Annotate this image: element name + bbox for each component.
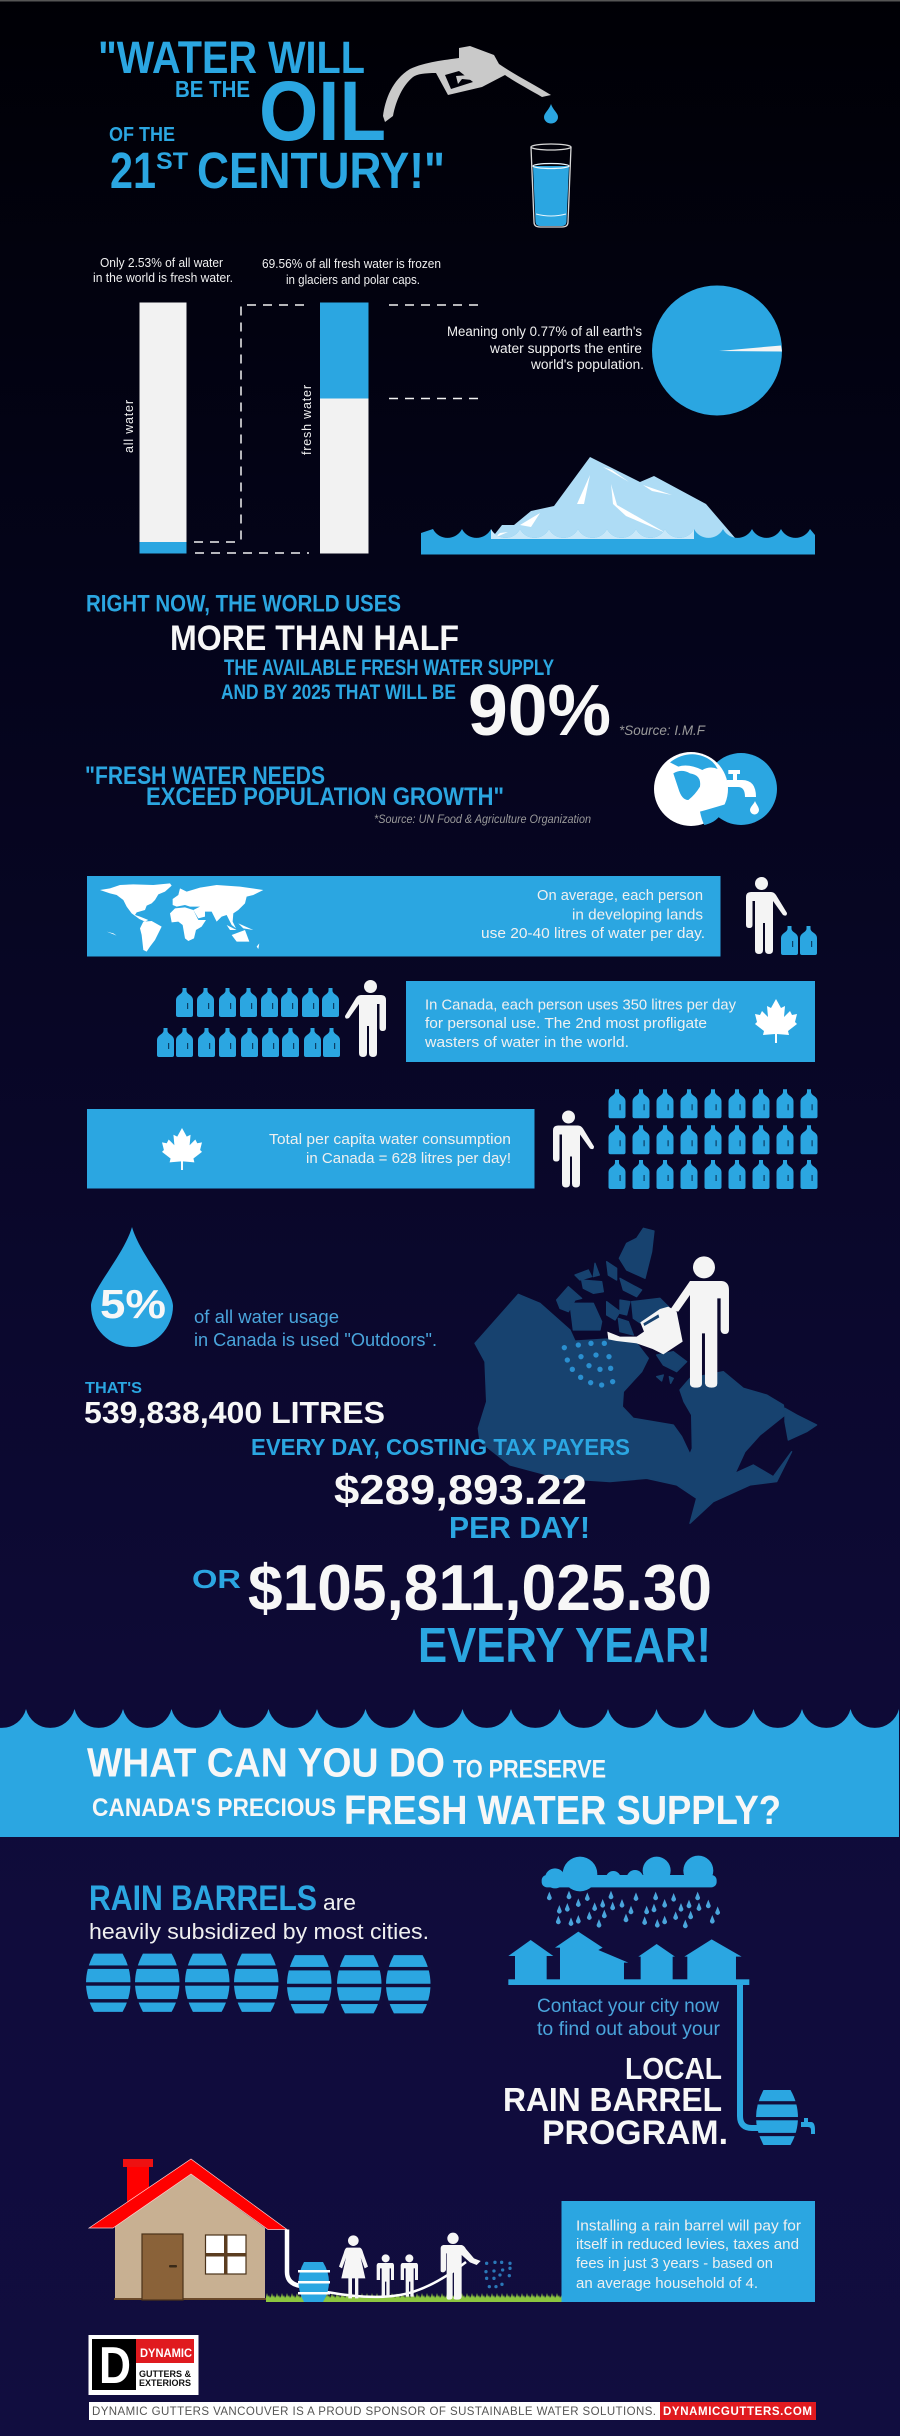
bar chart: fresh water: [300, 302, 368, 554]
text: local rain barrel program: RAIN BARREL: [503, 2081, 722, 2118]
icon: big water drop with 5 percent: 5%: [100, 1281, 166, 1327]
bar chart: all water: all water: [122, 400, 136, 453]
title: water will be the oil of the 21st century: [98, 32, 445, 199]
text: of all water usage: [194, 1307, 437, 1350]
logo: dynamic gutters and exteriors: EXTERIORS: [139, 2378, 191, 2389]
panel: installing a rain barrel: [562, 2201, 815, 2302]
heading: CANADA'S PRECIOUS: [92, 1794, 336, 1822]
stats: litres and cost: [84, 1380, 712, 1673]
child: [401, 2254, 418, 2297]
text: [424, 996, 736, 1051]
icon: water drop from nozzle: [544, 104, 558, 124]
logo: dynamic gutters and exteriors: D: [99, 2337, 131, 2395]
stats: litres and cost: 539,838,400 LITRES: [84, 1395, 385, 1430]
heading: right now the world uses more than half: THE AVAILABLE FRESH WATER SUPPLY: [224, 655, 554, 680]
panel: total per capita: [87, 1109, 534, 1188]
stats: litres and cost: EVERY DAY, COSTING TAX PAYERS: [251, 1434, 630, 1460]
panel: what can you do wave band: [0, 1709, 899, 1837]
text: contact your city: to find out about your: [537, 2019, 721, 2040]
bar chart: all water: [122, 302, 186, 554]
bottles: Canada personal use: [157, 988, 340, 1057]
text: local rain barrel program: PROGRAM.: [542, 2114, 728, 2152]
text: Total per capita water consumption: [269, 1131, 511, 1148]
text: In Canada, each person uses 350 litres per day: [425, 996, 736, 1014]
quote: fresh water needs exceed population growth: [85, 762, 504, 811]
text: only 2.53% of all water: in the world is fresh water.: [93, 271, 233, 285]
text: of all water usage: of all water usage: [194, 1307, 339, 1327]
heading: FRESH WATER SUPPLY?: [344, 1787, 781, 1833]
text: use 20-40 litres of water per day.: [481, 925, 705, 942]
quote: fresh water needs exceed population growth: "FRESH WATER NEEDS: [85, 762, 325, 790]
text: of all water usage: in Canada is used "Outdoors".: [194, 1330, 437, 1350]
man: [441, 2233, 481, 2300]
panel: Canada personal use: [406, 981, 815, 1062]
text: local rain barrel program: LOCAL: [625, 2051, 722, 2086]
icon: fuel nozzle: [383, 46, 551, 122]
text: contact your city: Contact your city now: [537, 1996, 719, 2017]
footer bar: sponsor line: DYNAMIC GUTTERS VANCOUVER IS A PROUD SPONSOR OF SUSTAINABLE WATER SOLUTIONS.: [92, 2406, 656, 2418]
woman: [339, 2235, 368, 2298]
icon: world map: [100, 883, 263, 952]
icon: spray dots: [484, 2261, 512, 2288]
title: water will be the oil of the 21st century: OIL: [259, 64, 386, 158]
source note: IMF: *Source: I.M.F: [619, 723, 706, 738]
title: water will be the oil of the 21st century: CENTURY!": [197, 142, 445, 199]
panel: developing lands: [87, 876, 720, 956]
heading: right now the world uses more than half: 90%: [468, 671, 611, 751]
icon: small rain barrel: [298, 2262, 330, 2302]
icon: iceberg: [421, 457, 815, 554]
text: in Canada = 628 litres per day!: [306, 1150, 511, 1167]
text: contact your city: [537, 1996, 721, 2040]
text: meaning only 0.77%: world's population.: [530, 357, 644, 372]
icon: globe: [654, 752, 728, 826]
icon: grass: [266, 2292, 563, 2302]
source note: UN food and agriculture: *Source: UN Food & Agriculture Organization: [374, 814, 591, 826]
icons: seven barrels: [85, 1954, 431, 2013]
icon: rain cloud: [542, 1856, 720, 1928]
icon: water drops from watering can: [562, 1341, 615, 1388]
stats: litres and cost: $105,811,025.30: [248, 1551, 712, 1624]
heading: [87, 1740, 781, 1833]
text: only 2.53% of all water: [93, 256, 233, 285]
title: water will be the oil of the 21st century: BE THE: [175, 76, 250, 102]
text: for personal use. The 2nd most profligate: [425, 1015, 707, 1032]
bottles: total consumption: [608, 1089, 818, 1189]
stats: litres and cost: EVERY YEAR!: [418, 1619, 711, 1673]
icon: window: [206, 2235, 246, 2274]
icon: maple leaf: [162, 1128, 202, 1170]
heading: right now the world uses more than half: [86, 590, 611, 751]
text: rain barrels: [89, 1879, 429, 1944]
icon: person facing bottles: [345, 980, 386, 1057]
text: 69.56% of fresh water frozen: 69.56% of all fresh water is frozen: [262, 257, 441, 271]
child: [377, 2254, 394, 2297]
bar chart: fresh water: fresh water: [300, 385, 314, 455]
icon: glass of water: [531, 144, 571, 227]
text: itself in reduced levies, taxes and: [576, 2236, 799, 2253]
text: fees in just 3 years - based on: [576, 2255, 773, 2272]
text: [576, 2218, 801, 2292]
logo: dynamic gutters and exteriors: DYNAMIC: [140, 2348, 192, 2360]
icon: downpipe to barrel with tap: [740, 1985, 815, 2145]
icon: houses with gutter line: [508, 1932, 749, 1985]
title: water will be the oil of the 21st century: OF THE: [109, 124, 175, 146]
text: [481, 887, 705, 942]
quote: fresh water needs exceed population growth: EXCEED POPULATION GROWTH": [146, 783, 504, 811]
heading: WHAT CAN YOU DO: [87, 1740, 445, 1786]
text: meaning only 0.77%: Meaning only 0.77% of all earth's: [447, 324, 642, 339]
text: local rain barrel program: [503, 2051, 728, 2152]
map: Canada: [475, 1228, 817, 1523]
title: water will be the oil of the 21st century: "WATER WILL: [98, 32, 365, 83]
icon: house: [89, 2159, 287, 2300]
icon: big water drop with 5 percent: [91, 1227, 173, 1347]
text: 69.56% of fresh water frozen: [262, 257, 441, 287]
text: 69.56% of fresh water frozen: in glaciers and polar caps.: [286, 273, 420, 287]
text: an average household of 4.: [576, 2275, 758, 2292]
text: only 2.53% of all water: Only 2.53% of all water: [100, 256, 223, 270]
title: water will be the oil of the 21st century: 21: [110, 142, 156, 199]
text: rain barrels: are: [323, 1890, 356, 1915]
text: [269, 1131, 511, 1167]
icon: gutter and hose: [287, 2230, 466, 2297]
text: rain barrels: RAIN BARRELS: [89, 1879, 317, 1918]
footer bar: sponsor line: DYNAMICGUTTERS.COM: [663, 2406, 812, 2418]
pie chart: 0.77 percent: [652, 286, 782, 416]
icon: family watering garden: [339, 2233, 481, 2300]
stats: litres and cost: THAT'S: [85, 1380, 142, 1397]
text: wasters of water in the world.: [424, 1034, 629, 1051]
heading: TO PRESERVE: [453, 1756, 606, 1784]
heading: right now the world uses more than half: AND BY 2025 THAT WILL BE: [221, 681, 456, 704]
icon: person with two bottles: [746, 877, 817, 955]
text: rain barrels: heavily subsidized by most cities.: [89, 1919, 429, 1944]
icon: person with watering can: [607, 1256, 729, 1388]
text: meaning only 0.77%: [447, 324, 644, 372]
text: Installing a rain barrel will pay for: [576, 2218, 801, 2234]
text: On average, each person: [537, 887, 703, 904]
footer bar: sponsor line: [89, 2402, 816, 2420]
icon: faucet circle: [705, 753, 777, 825]
logo: dynamic gutters and exteriors: GUTTERS &: [139, 2369, 191, 2380]
stats: litres and cost: OR: [192, 1564, 241, 1594]
heading: right now the world uses more than half: MORE THAN HALF: [170, 619, 459, 658]
icon: maple leaf: [755, 999, 797, 1043]
stats: litres and cost: $289,893.22: [334, 1466, 587, 1513]
heading: right now the world uses more than half: RIGHT NOW, THE WORLD USES: [86, 590, 401, 618]
icon: door: [142, 2234, 183, 2300]
text: in developing lands: [572, 906, 703, 924]
text: meaning only 0.77%: water supports the entire: [489, 341, 642, 356]
logo: dynamic gutters and exteriors: [88, 2335, 198, 2395]
stats: litres and cost: PER DAY!: [449, 1510, 590, 1545]
title: water will be the oil of the 21st century: ST: [156, 148, 188, 175]
icon: person: [553, 1110, 594, 1188]
